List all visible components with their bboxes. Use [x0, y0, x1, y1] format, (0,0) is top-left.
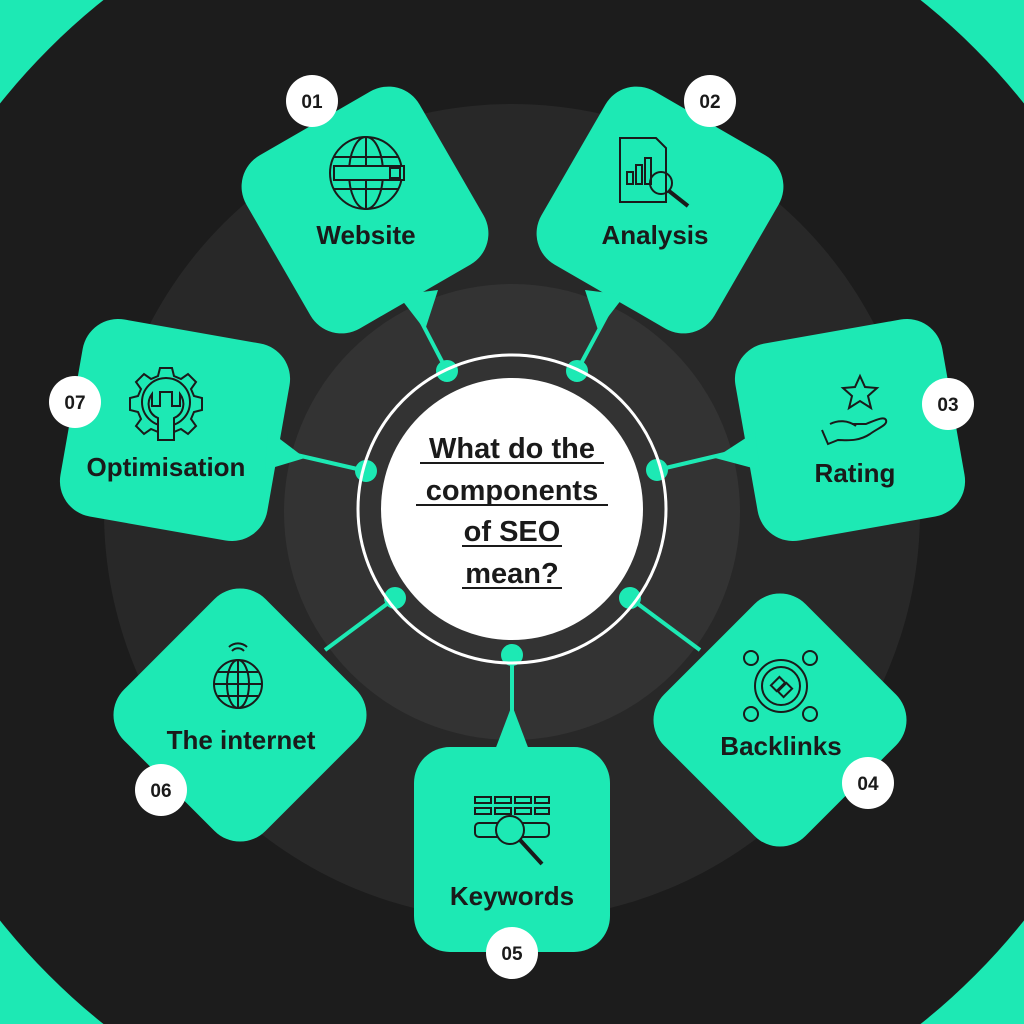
badges: 01	[301, 92, 323, 113]
badges: 05	[501, 944, 523, 965]
center circle: mean?	[465, 558, 559, 590]
card: analysis: Analysis	[602, 220, 708, 250]
badges	[49, 75, 974, 979]
card: backlinks: Backlinks	[720, 731, 842, 761]
card: rating	[715, 313, 971, 547]
badges: 03	[937, 395, 959, 416]
center circle: components	[426, 475, 598, 507]
card: the internet	[99, 574, 381, 856]
card: rating: Rating	[815, 458, 895, 488]
card: keywords	[414, 705, 610, 952]
card: keywords: Keywords	[450, 881, 574, 911]
card: backlinks	[639, 579, 921, 861]
badges: 02	[699, 92, 721, 113]
badges: 04	[857, 774, 879, 795]
center circle	[358, 355, 666, 663]
center circle: What do the	[429, 433, 595, 465]
card: analysis	[523, 73, 797, 347]
card: website	[228, 73, 502, 347]
badges: 06	[150, 781, 172, 802]
badges: 07	[64, 393, 86, 414]
card: optimisation	[54, 313, 305, 547]
card: the internet: The internet	[167, 725, 316, 755]
card: optimisation: Optimisation	[87, 452, 245, 482]
connectors	[275, 300, 750, 750]
center circle: of SEO	[464, 516, 560, 548]
card: website: Website	[316, 220, 416, 250]
